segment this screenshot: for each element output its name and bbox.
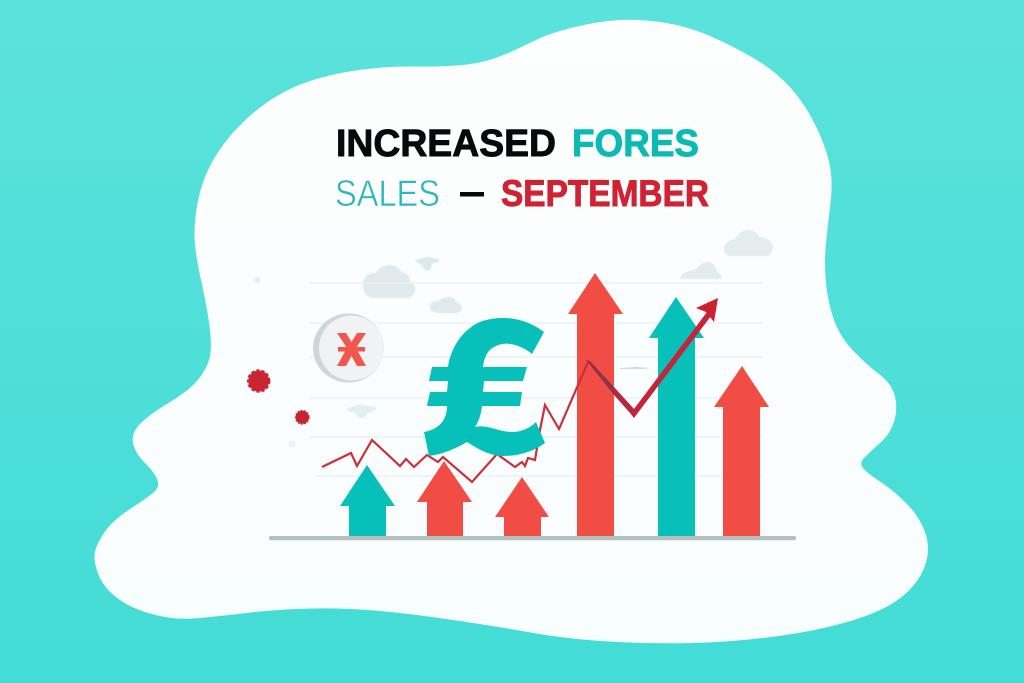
faint dot left bbox=[254, 276, 260, 284]
cloud: thin streak right bbox=[620, 367, 651, 369]
arrow 2 red bbox=[417, 461, 472, 536]
cloud: right small bbox=[680, 262, 722, 279]
cloud: streak top bbox=[415, 257, 440, 271]
thick falling part bbox=[586, 360, 614, 395]
title line 2: SEPTEMBER bbox=[501, 173, 709, 214]
arrow 1 teal bbox=[340, 465, 395, 536]
title line 1 bbox=[336, 123, 699, 165]
white blob panel bbox=[94, 20, 928, 643]
clouds bbox=[254, 230, 773, 448]
title line 2: SALES bbox=[335, 173, 440, 214]
arrow 3 red bbox=[495, 477, 549, 536]
icon: red gear large bbox=[248, 370, 270, 392]
trend arrowhead bbox=[696, 298, 718, 322]
title bbox=[335, 123, 709, 214]
faint dot lower bbox=[288, 440, 296, 448]
icon: coin with X symbol bbox=[313, 314, 384, 382]
thick rising part bbox=[631, 312, 711, 418]
title line 1: FORES bbox=[572, 123, 699, 165]
icon: euro symbol bbox=[424, 318, 545, 456]
title line 1: INCREASED bbox=[336, 123, 556, 165]
cloud: upper right bbox=[724, 230, 773, 256]
title line 2 bbox=[335, 173, 709, 214]
trend line bbox=[322, 298, 718, 482]
bar arrows bbox=[340, 273, 769, 536]
icon: red gear small bbox=[295, 410, 309, 424]
arrow 6 red bbox=[714, 366, 769, 536]
thin zigzag part bbox=[322, 362, 588, 482]
cloud: small center bbox=[430, 297, 462, 313]
grid lines bbox=[309, 283, 763, 476]
baseline axis bbox=[269, 536, 796, 540]
arrow 5 teal tall bbox=[649, 297, 704, 536]
cloud: large left bbox=[363, 265, 415, 298]
cloud: streak lower bbox=[345, 405, 377, 418]
arrow 4 red tall bbox=[568, 273, 623, 536]
